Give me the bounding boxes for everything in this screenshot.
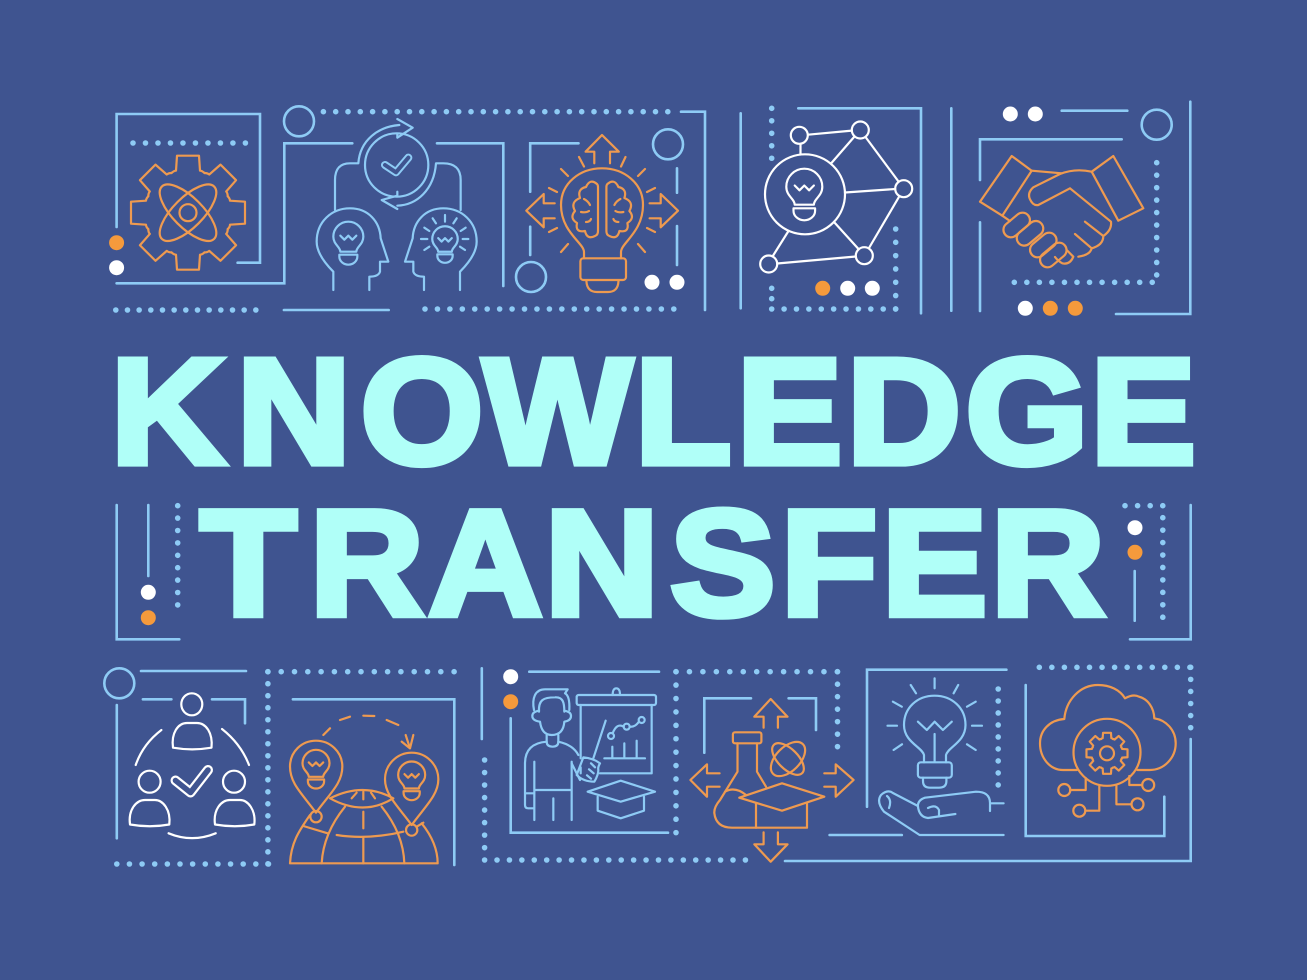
top decor: frames and lines, left group: [109, 106, 705, 310]
icon: team with check: [130, 693, 255, 838]
title: TRANSFER: [200, 479, 1105, 647]
middle right decor: [1125, 505, 1191, 639]
top decor: handshake frame: [951, 102, 1190, 316]
icon: idea network: [760, 122, 912, 272]
top decor: network frame: [741, 108, 921, 313]
bottom decor: center frames: [482, 668, 838, 860]
icon: globe with idea pins: [290, 716, 438, 863]
icon: flask, atom and graduation cap with arrows: [690, 699, 854, 862]
bottom decor: right frames: [785, 667, 1191, 861]
title: [111, 328, 1196, 647]
title: KNOWLEDGE: [111, 328, 1196, 495]
icon: gear with atom: [131, 156, 245, 270]
bottom decor: left frames: [104, 668, 454, 865]
icon: light bulb over hand: [879, 678, 1004, 835]
icon: cloud with gear and circuit: [1040, 685, 1176, 817]
middle left decor: [117, 505, 179, 639]
icon: handshake: [980, 156, 1143, 270]
icon: brain light bulb with arrows: [526, 135, 678, 292]
icon: teacher at presentation board: [525, 688, 656, 820]
icon: two heads sharing ideas with refresh check: [317, 119, 477, 290]
